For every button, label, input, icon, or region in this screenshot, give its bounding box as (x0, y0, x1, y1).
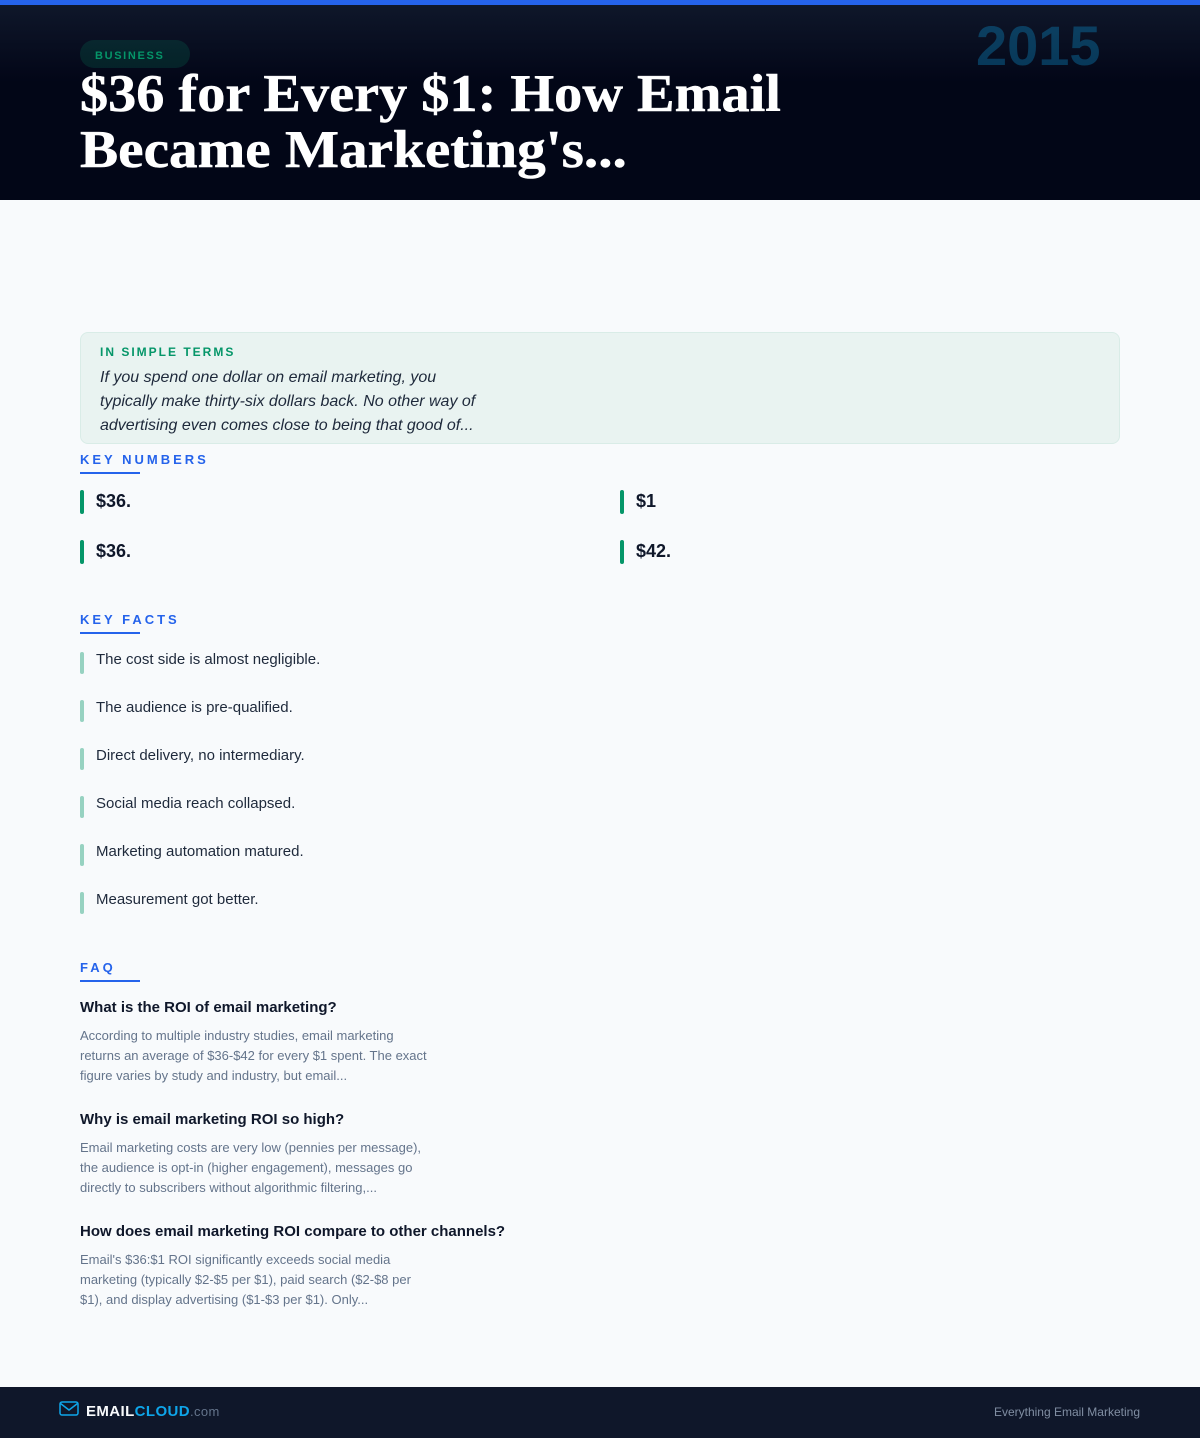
faq answer 2: Email marketing costs are very low (pennies per message), (80, 1140, 421, 1155)
heading: faq: FAQ (80, 960, 116, 975)
fact 5: Marketing automation matured. (96, 843, 304, 860)
key number: $1 (620, 490, 656, 514)
faq answer 1: figure varies by study and industry, but email... (80, 1068, 347, 1083)
title: Became Marketing's... (80, 121, 627, 179)
fact 6 (80, 891, 259, 914)
panel text: If you spend one dollar on email marketing, you (100, 369, 436, 386)
key number: $36 second: $36. (96, 541, 131, 561)
fact 2: The audience is pre-qualified. (96, 699, 293, 716)
faq question 1: What is the ROI of email marketing? (80, 999, 337, 1016)
heading: key numbers: KEY NUMBERS (80, 452, 209, 467)
panel text (100, 369, 477, 434)
fact 4 (80, 795, 295, 818)
faq answer 3: Email's $36:$1 ROI significantly exceeds social media (80, 1252, 390, 1267)
category badge: BUSINESS (95, 50, 164, 62)
footer tagline: Everything Email Marketing (994, 1405, 1140, 1419)
fact 6: Measurement got better. (96, 891, 259, 908)
panel: in simple terms (80, 332, 1120, 444)
faq answer 3: marketing (typically $2-$5 per $1), paid search ($2-$8 per (80, 1272, 411, 1287)
faq answer 2: the audience is opt-in (higher engagement), messages go (80, 1160, 412, 1175)
faq answer 2: directly to subscribers without algorithmic filtering,... (80, 1180, 377, 1195)
fact 1: The cost side is almost negligible. (96, 651, 320, 668)
footer logo: EMAILCLOUD.com (86, 1403, 220, 1420)
fact 2 (80, 699, 293, 722)
faq answer 1: According to multiple industry studies, email marketing (80, 1028, 394, 1043)
fact 5 (80, 843, 304, 866)
faq question 2: Why is email marketing ROI so high? (80, 1111, 344, 1128)
category badge (80, 40, 190, 68)
faq answer 1: returns an average of $36-$42 for every $1 spent. The exact (80, 1048, 427, 1063)
faq answer 3: $1), and display advertising ($1-$3 per $1). Only... (80, 1292, 368, 1307)
panel label: IN SIMPLE TERMS (100, 345, 235, 359)
key number: $36 (80, 490, 131, 514)
heading: key facts: KEY FACTS (80, 612, 180, 627)
header banner (0, 0, 1200, 200)
year: 2015 (976, 14, 1101, 77)
key number: $36: $36. (96, 491, 131, 511)
icon: envelope (59, 1401, 79, 1416)
fact 3: Direct delivery, no intermediary. (96, 747, 305, 764)
title (80, 65, 781, 179)
key number: $1: $1 (636, 491, 656, 511)
key number: $36 second (80, 540, 131, 564)
key number: $42 (620, 540, 671, 564)
panel text: advertising even comes close to being that good of... (100, 417, 474, 434)
footer bar (0, 1387, 1200, 1438)
faq question 3: How does email marketing ROI compare to other channels? (80, 1223, 505, 1240)
faq answer 2 (80, 1140, 421, 1195)
panel text: typically make thirty-six dollars back. No other way of (100, 393, 475, 410)
key number: $42: $42. (636, 541, 671, 561)
title: $36 for Every $1: How Email (80, 65, 781, 123)
faq answer 1 (80, 1028, 427, 1083)
fact 4: Social media reach collapsed. (96, 795, 295, 812)
faq answer 3 (80, 1252, 411, 1307)
fact 1 (80, 651, 320, 674)
fact 3 (80, 747, 305, 770)
